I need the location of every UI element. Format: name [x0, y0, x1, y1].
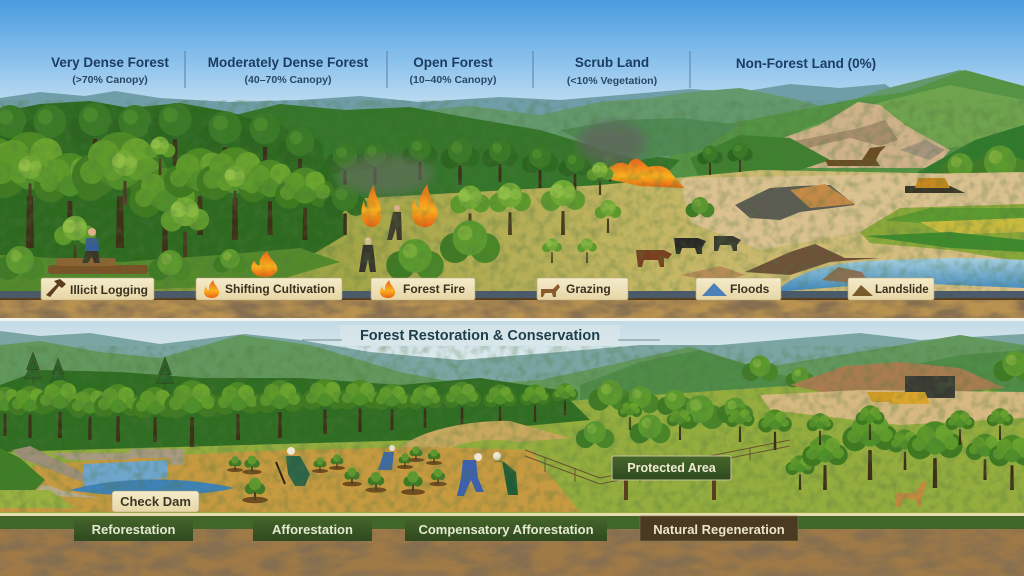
right forest patch — [918, 125, 1024, 180]
tall forest backdrop — [0, 370, 590, 452]
excavators — [825, 146, 965, 193]
label: afforestation: Afforestation — [272, 522, 353, 537]
road band — [0, 291, 1024, 299]
smoke — [337, 155, 433, 195]
green hills — [0, 335, 1024, 420]
label: reforestation — [74, 516, 193, 541]
label: natural regeneration: Natural Regeneration — [653, 522, 785, 537]
label: landslide — [848, 278, 934, 300]
quarry restoration site — [760, 362, 1024, 425]
header: open forest — [410, 55, 496, 86]
label: illicit logging: Illicit Logging — [70, 283, 148, 297]
dense forest backdrop — [0, 101, 345, 282]
section title: Forest Restoration & Conservation — [360, 328, 600, 344]
icon: flood wave — [702, 283, 727, 296]
distant forest band — [215, 104, 680, 200]
icon: flame — [380, 280, 395, 298]
planting workers — [276, 445, 518, 496]
planting ground — [0, 447, 580, 512]
distant smoke plume — [578, 121, 646, 165]
grazing animals — [636, 236, 741, 267]
mid ground — [0, 170, 1024, 295]
icon: rockslide — [852, 285, 873, 296]
header: open forest: Open Forest — [413, 55, 493, 70]
spoil piles — [735, 185, 855, 220]
landslide rocks — [822, 267, 870, 285]
young trees right background — [576, 351, 1024, 448]
burning workers — [359, 205, 402, 272]
header: moderately dense forest — [208, 55, 369, 86]
panel: forest cover classes and degradation — [0, 0, 1024, 318]
label: floods: Floods — [730, 282, 770, 296]
moderately dense treeline — [325, 138, 753, 190]
header: very dense forest — [51, 55, 169, 86]
label: reforestation: Reforestation — [92, 522, 175, 537]
label: afforestation — [253, 516, 372, 541]
foliage texture — [0, 346, 1024, 512]
saplings — [227, 446, 447, 503]
forest understory — [0, 248, 340, 295]
soil cross-section — [0, 513, 1024, 576]
label: illicit logging — [41, 278, 154, 300]
label: compensatory afforestation — [405, 516, 607, 541]
open forest trees — [386, 162, 714, 280]
header: scrub land: (<10% Vegetation) — [567, 75, 657, 87]
quarry hillside — [762, 102, 950, 168]
label: forest fire: Forest Fire — [403, 282, 465, 296]
sign: protected area — [612, 456, 731, 500]
label: floods — [696, 278, 781, 300]
icon: grazing animal — [541, 284, 560, 297]
restored forest left — [0, 352, 578, 447]
header: very dense forest: Very Dense Forest — [51, 55, 169, 70]
check dam — [0, 446, 234, 508]
right green mountain — [670, 70, 1024, 210]
header: very dense forest: (>70% Canopy) — [72, 74, 148, 86]
deer — [895, 481, 927, 507]
label: compensatory afforestation: Compensatory Afforestation — [418, 522, 594, 537]
flood river — [775, 258, 1024, 292]
restoration ground — [0, 385, 1024, 515]
crop fields — [860, 204, 1024, 262]
sky — [0, 0, 1024, 125]
label: shifting cultivation — [196, 278, 342, 300]
eroded soil strip — [0, 298, 1024, 318]
panel: forest restoration and conservation — [0, 321, 1024, 576]
header: scrub land: Scrub Land — [575, 55, 649, 70]
wooden fence — [525, 440, 790, 484]
header: moderately dense forest: (40–70% Canopy) — [245, 74, 331, 86]
restoration sky — [0, 321, 1024, 371]
label: landslide: Landslide — [875, 284, 929, 296]
very dense forest trees — [0, 103, 367, 268]
label: grazing — [537, 278, 628, 300]
header: open forest: (10–40% Canopy) — [410, 74, 496, 86]
icon: flame — [204, 280, 219, 298]
section title — [302, 325, 660, 345]
trail — [400, 421, 570, 448]
far green hills — [400, 70, 1024, 200]
label: check dam: Check Dam — [120, 494, 191, 509]
label: forest fire — [371, 278, 475, 300]
label: shifting cultivation: Shifting Cultivation — [225, 282, 335, 296]
header: moderately dense forest: Moderately Dense Forest — [208, 55, 369, 70]
forest fires — [251, 159, 684, 277]
eroded bank — [745, 244, 880, 275]
label: natural regeneration — [640, 516, 798, 541]
sign: protected area: Protected Area — [627, 461, 717, 475]
header: scrub land — [567, 55, 657, 87]
far mountain ridge — [0, 84, 1024, 190]
far ridge — [0, 331, 1024, 400]
illicit logging worker and logs — [48, 228, 148, 274]
foliage texture — [0, 100, 1024, 292]
label: grazing: Grazing — [566, 282, 611, 296]
header: non-forest land: Non-Forest Land (0%) — [736, 56, 876, 71]
icon: axe — [46, 279, 66, 297]
label: check dam — [112, 491, 199, 512]
divider band — [0, 318, 1024, 321]
conservation trees — [618, 401, 1024, 490]
